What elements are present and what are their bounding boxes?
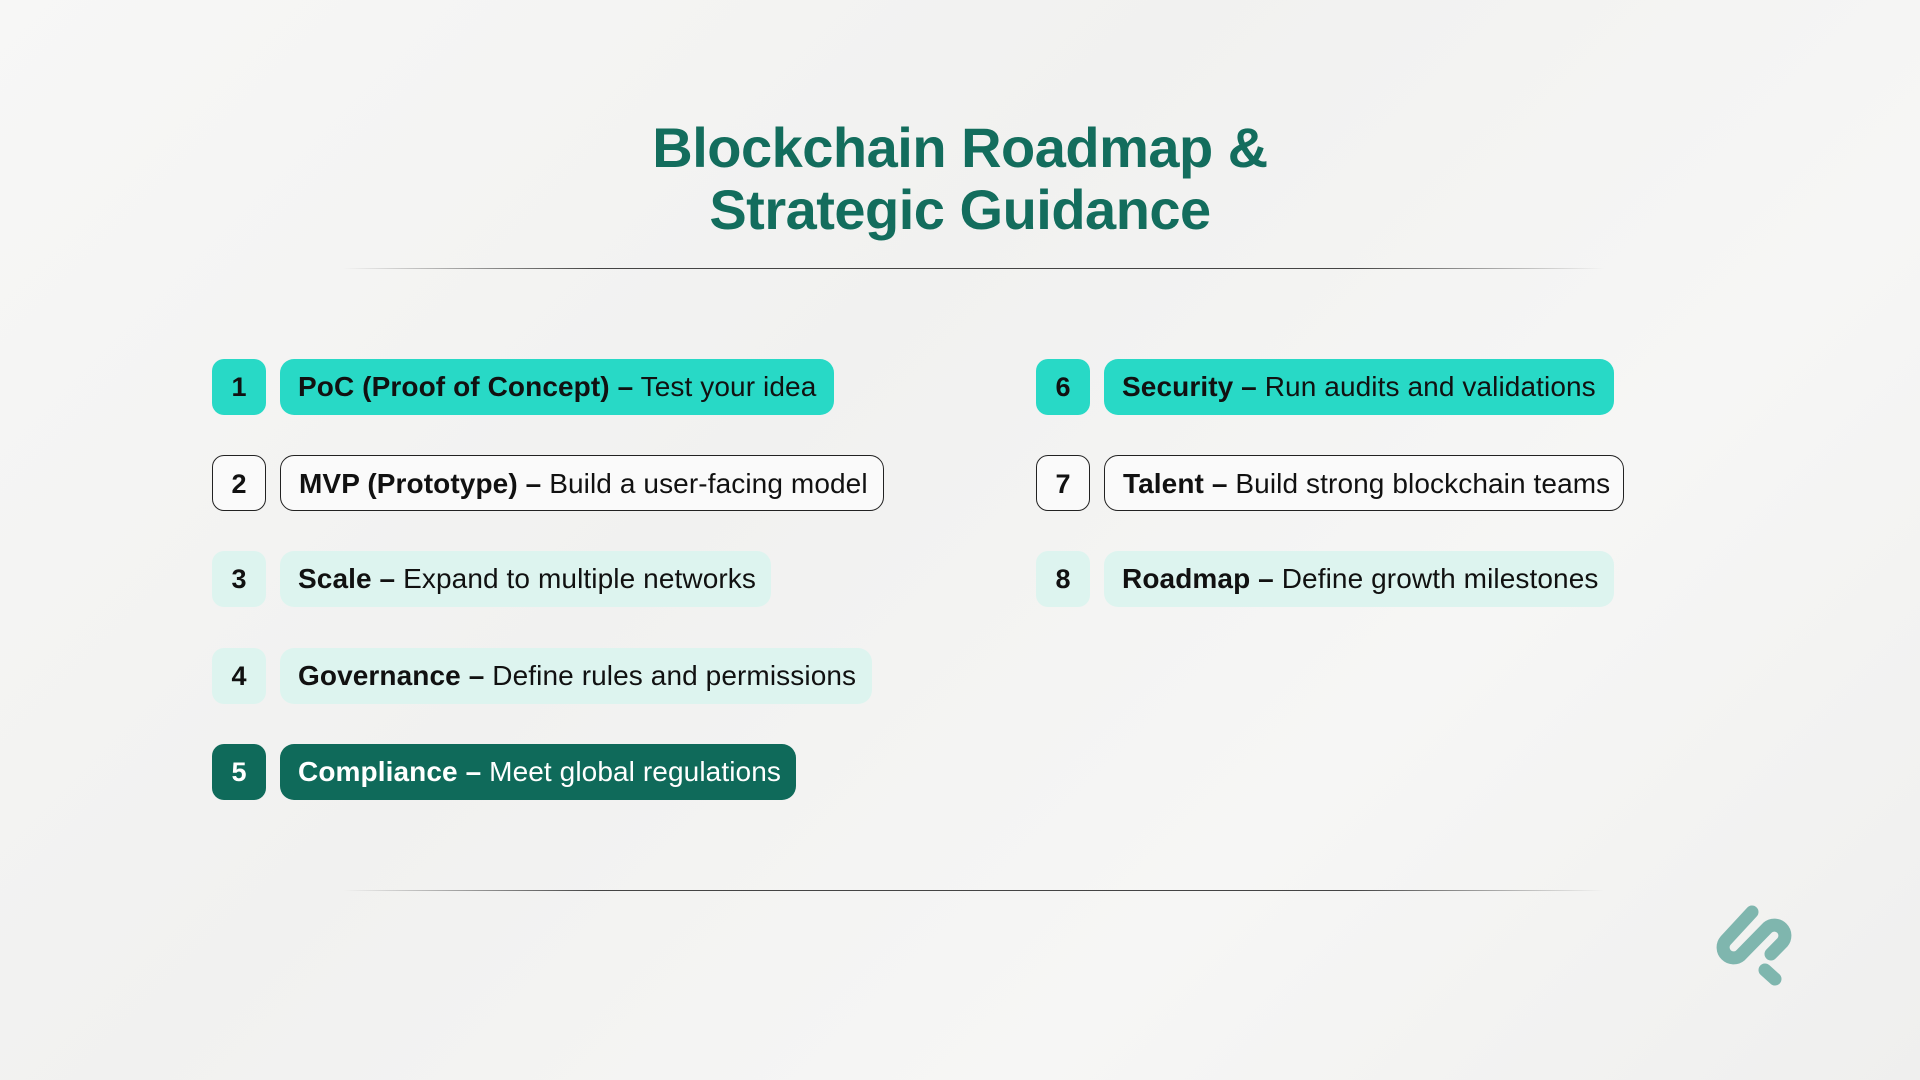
item 8: 8 [1055,564,1071,594]
title: Blockchain Roadmap & [652,116,1268,179]
item 3: 3 [231,564,247,594]
item 3 [212,551,771,607]
icon: logo [1716,906,1792,986]
item 5 [212,744,796,800]
item 7 [1036,455,1624,511]
item 6 [1036,359,1614,415]
item 2: 2 [231,469,247,499]
item 5: Compliance – Meet global regulations [298,756,781,787]
item 4: Governance – Define rules and permissions [298,660,856,691]
item 1: 1 [231,372,247,402]
item 6: Security – Run audits and validations [1122,371,1596,402]
item 2 [212,455,884,511]
item 4: 4 [231,661,247,691]
item 5: 5 [231,757,247,787]
item 1: PoC (Proof of Concept) – Test your idea [298,371,816,402]
item 3: Scale – Expand to multiple networks [298,563,756,594]
item 4 [212,648,872,704]
item 7: 7 [1055,469,1071,499]
title [652,116,1268,241]
item 8 [1036,551,1614,607]
title: Strategic Guidance [709,178,1211,241]
item 6: 6 [1055,372,1071,402]
item 2: MVP (Prototype) – Build a user-facing model [299,468,868,499]
item 1 [212,359,834,415]
item 8: Roadmap – Define growth milestones [1122,563,1598,594]
item 7: Talent – Build strong blockchain teams [1123,468,1610,499]
